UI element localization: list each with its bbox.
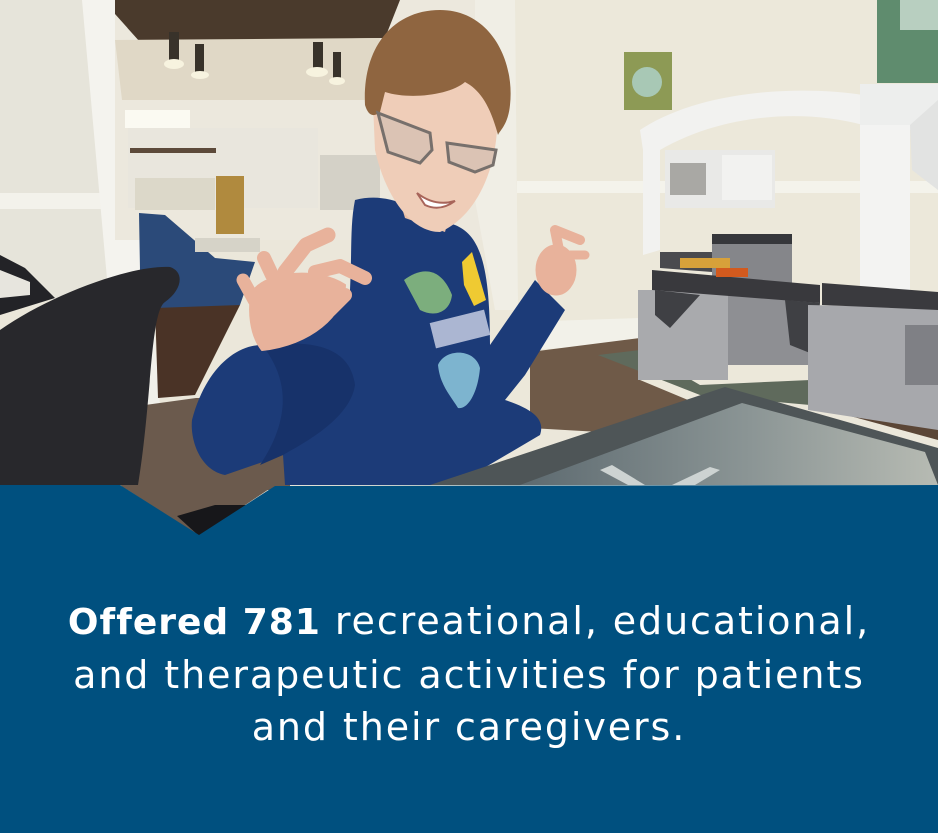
blue sofa in the background	[139, 213, 260, 308]
zebra cushion	[0, 255, 55, 315]
neck	[395, 185, 455, 232]
caption text: and their caregivers.	[252, 705, 686, 749]
right hand with spread fingers	[243, 235, 365, 350]
floor visible through the notch	[120, 485, 275, 536]
left hand with spread fingers	[536, 230, 585, 295]
wood floor	[122, 305, 938, 490]
room background	[0, 0, 938, 540]
caption text: Offered 781 recreational, educational,	[68, 599, 870, 643]
wall paintings	[624, 0, 938, 110]
hair	[365, 10, 511, 135]
sweatshirt graphic: Pikachu	[462, 252, 486, 306]
sweatshirt graphic: Pokemon lettering	[430, 310, 490, 348]
smile	[417, 193, 455, 208]
hoodie body	[192, 198, 565, 485]
glasses	[378, 113, 496, 172]
interactive glass table	[430, 387, 938, 485]
blue banner with downward notch	[0, 485, 938, 833]
ceiling lights	[164, 32, 345, 85]
caption text	[68, 599, 870, 749]
boy	[192, 10, 585, 485]
wicker chair	[0, 267, 180, 485]
sleeve shadow	[260, 343, 355, 465]
sweatshirt graphic: Bulbasaur	[404, 271, 452, 314]
sweatshirt graphic: Squirtle	[438, 353, 480, 408]
toy kitchen	[638, 84, 938, 430]
caption text: and therapeutic activities for patients	[73, 653, 865, 697]
face	[372, 66, 497, 232]
